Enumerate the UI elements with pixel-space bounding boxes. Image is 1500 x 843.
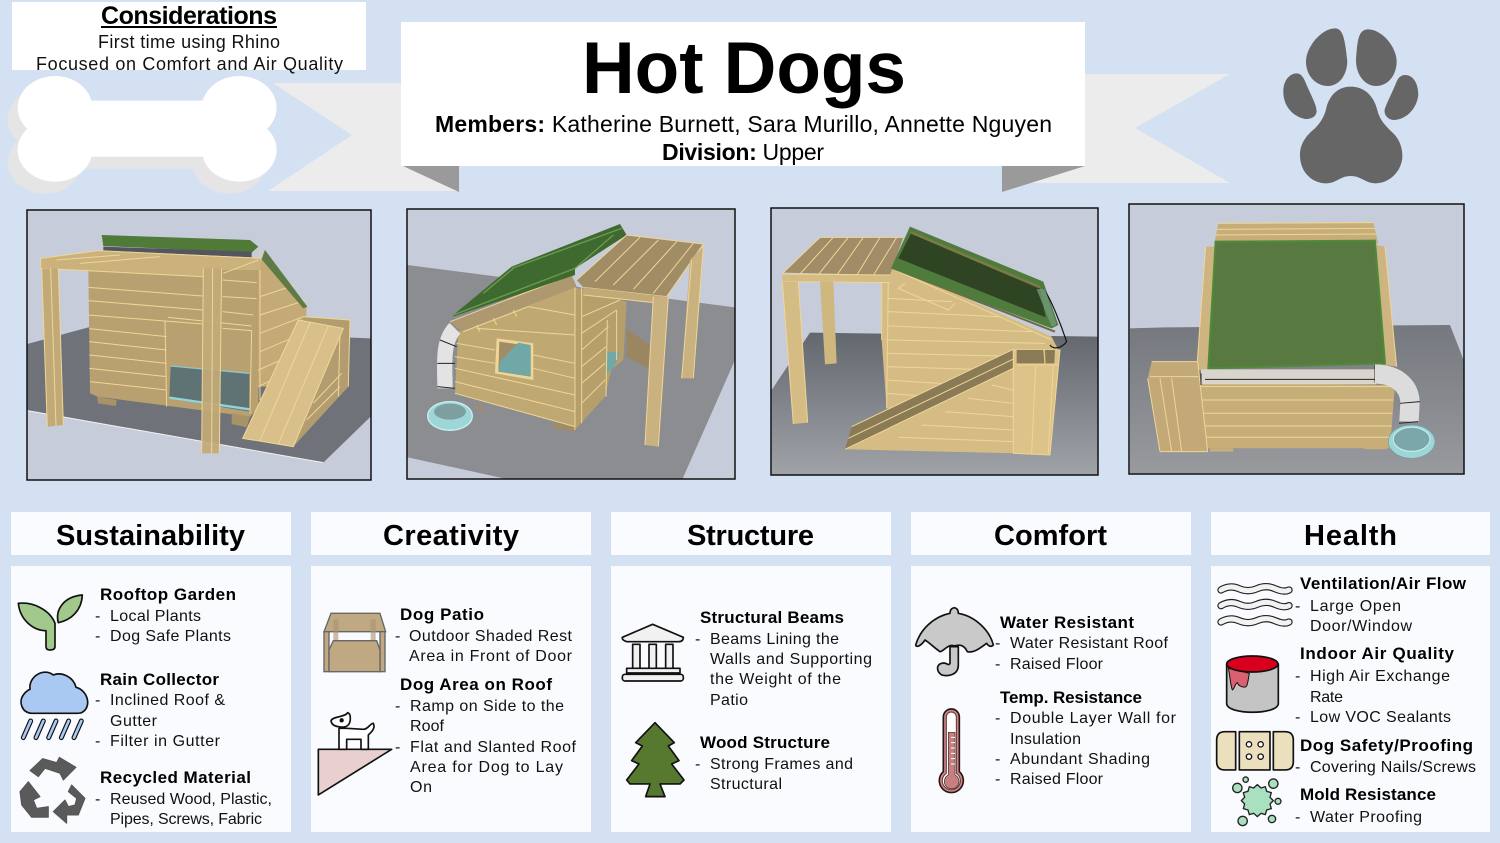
icon: dog on ramp <box>318 713 392 795</box>
text: Dog Safety/Proofing: Covering Nails/Screws <box>1310 759 1476 776</box>
text: Water Resistant: - <box>995 635 1000 652</box>
render 1 frame <box>27 210 371 480</box>
text: Rain Collector: - <box>95 692 100 709</box>
text: Water Resistant: Water Resistant Roof <box>1010 635 1169 652</box>
text: Dog Area on Roof: Area for Dog to Lay <box>410 759 563 776</box>
text: Water Resistant: Water Resistant <box>1000 613 1134 632</box>
icon: patio shelter <box>324 613 386 672</box>
heading: Structure: Structure <box>687 520 814 552</box>
text: Dog Area on Roof <box>395 675 577 796</box>
icon: air waves <box>1221 587 1289 623</box>
text: Mold Resistance: Water Proofing <box>1310 809 1422 826</box>
text: Rooftop Garden: - <box>95 628 100 645</box>
text: Ventilation/Air Flow: Large Open <box>1310 598 1401 615</box>
considerations text: Focused on Comfort and Air Quality <box>36 54 343 74</box>
text: Indoor Air Quality: Low VOC Sealants <box>1310 709 1451 726</box>
icon: dog bone <box>8 76 277 194</box>
icon: sprout <box>18 595 82 650</box>
considerations panel <box>12 2 366 74</box>
text: Temp. Resistance <box>995 688 1177 788</box>
render 3 frame <box>771 208 1098 475</box>
render 2: rear three-quarter view <box>407 209 735 479</box>
text: Ventilation/Air Flow: Door/Window <box>1310 618 1412 635</box>
text: Recycled Material <box>95 768 272 828</box>
render 2 frame <box>407 209 735 479</box>
render 3: side view with ramp <box>771 208 1098 475</box>
text: Structural Beams: the Weight of the <box>710 671 841 688</box>
text: Dog Area on Roof: On <box>410 779 432 796</box>
text: Rain Collector: Rain Collector <box>100 670 219 689</box>
icon: columned building <box>622 624 683 681</box>
text: Water Resistant: Raised Floor <box>1010 656 1104 673</box>
text: Rooftop Garden: Rooftop Garden <box>100 585 236 604</box>
text: Wood Structure: Wood Structure <box>700 733 830 752</box>
render 1: front view of doghouse <box>27 210 371 480</box>
render 4: top view with green roof <box>1129 204 1464 473</box>
text: Structural Beams: - <box>695 631 700 648</box>
icon: paint can <box>1227 656 1278 712</box>
panel: Sustainability <box>11 512 291 832</box>
text: Recycled Material: - <box>95 791 100 808</box>
text: Ventilation/Air Flow <box>1295 574 1467 635</box>
heading: Health: Health <box>1304 520 1397 552</box>
text: Wood Structure <box>695 733 853 793</box>
text: Indoor Air Quality: - <box>1295 668 1300 685</box>
banner ribbon left <box>268 83 459 191</box>
title panel <box>401 22 1085 166</box>
icon: mold spores <box>1233 777 1281 826</box>
heading: Sustainability: Sustainability <box>56 520 245 552</box>
text: Mold Resistance: Mold Resistance <box>1300 785 1436 804</box>
text: Temp. Resistance: Raised Floor <box>1010 771 1104 788</box>
text: Recycled Material: Recycled Material <box>100 768 251 787</box>
text: Rain Collector: Filter in Gutter <box>110 733 221 750</box>
text: Structural Beams: Patio <box>710 692 748 709</box>
text: Indoor Air Quality: - <box>1295 709 1300 726</box>
panel: Health <box>1211 512 1490 832</box>
text: Wood Structure: Strong Frames and <box>710 756 853 773</box>
text: Temp. Resistance: Double Layer Wall for <box>1010 710 1177 727</box>
icon: pine tree <box>627 723 684 797</box>
text: Wood Structure: Structural <box>710 776 782 793</box>
text: Temp. Resistance: Abundant Shading <box>1010 751 1150 768</box>
text: Water Resistant <box>995 613 1169 673</box>
members line: Members: Katherine Burnett, Sara Murillo, Annette Nguyen <box>435 111 1052 137</box>
text: Rooftop Garden: Dog Safe Plants <box>110 628 231 645</box>
text: Dog Patio: Area in Front of Door <box>409 648 573 665</box>
text: Dog Area on Roof: Flat and Slanted Roof <box>410 739 577 756</box>
considerations heading: Considerations <box>101 2 277 30</box>
ribbon fold right <box>1002 166 1085 192</box>
considerations text: First time using Rhino <box>98 32 280 52</box>
text: Rain Collector <box>95 670 225 750</box>
text: Rain Collector: Inclined Roof & <box>110 692 225 709</box>
considerations text <box>36 32 343 74</box>
icon: recycling arrows <box>20 757 85 823</box>
text: Dog Patio <box>395 605 573 665</box>
text: Rain Collector: Gutter <box>110 713 158 730</box>
icon: paw print <box>1283 28 1418 183</box>
banner ribbon right <box>1002 74 1230 183</box>
text: Wood Structure: - <box>695 756 700 773</box>
text: Mold Resistance: - <box>1295 809 1300 826</box>
text: Dog Patio: - <box>395 628 400 645</box>
text: Dog Area on Roof: Dog Area on Roof <box>400 675 552 694</box>
text: Dog Area on Roof: Roof <box>410 718 445 735</box>
text: Temp. Resistance: - <box>995 771 1000 788</box>
text: Indoor Air Quality <box>1295 644 1455 726</box>
text: Structural Beams <box>695 608 872 709</box>
text: Recycled Material: Reused Wood, Plastic, <box>110 791 272 808</box>
panel: Creativity <box>311 512 591 832</box>
text: Rooftop Garden <box>95 585 236 645</box>
text: Rain Collector: - <box>95 733 100 750</box>
text: Structural Beams: Walls and Supporting <box>710 651 872 668</box>
title: Hot Dogs <box>582 28 906 109</box>
text: Dog Patio: Dog Patio <box>400 605 484 624</box>
text: Temp. Resistance: Temp. Resistance <box>1000 688 1142 707</box>
heading: Creativity: Creativity <box>383 520 519 552</box>
text: Structural Beams: Beams Lining the <box>710 631 839 648</box>
panel: Comfort <box>911 512 1191 832</box>
text: Dog Area on Roof: Ramp on Side to the <box>410 698 564 715</box>
division line: Division: Upper <box>662 139 824 165</box>
text: Rooftop Garden: - <box>95 608 100 625</box>
text: Recycled Material: Pipes, Screws, Fabric <box>110 811 262 828</box>
render 4 frame <box>1129 204 1464 474</box>
text: Mold Resistance <box>1295 785 1436 826</box>
text: Dog Safety/Proofing: - <box>1295 759 1300 776</box>
icon: rain cloud <box>21 672 88 738</box>
heading: Comfort: Comfort <box>994 520 1107 552</box>
ribbon fold left <box>403 166 459 192</box>
text: Indoor Air Quality: Indoor Air Quality <box>1300 644 1455 663</box>
text: Indoor Air Quality: High Air Exchange <box>1310 668 1450 685</box>
panel: Structure <box>611 512 891 832</box>
text: Temp. Resistance: Insulation <box>1010 731 1081 748</box>
text: Temp. Resistance: - <box>995 751 1000 768</box>
icon: thermometer <box>939 709 963 793</box>
text: Dog Safety/Proofing <box>1295 736 1476 776</box>
text: Ventilation/Air Flow: - <box>1295 598 1300 615</box>
text: Ventilation/Air Flow: Ventilation/Air Flow <box>1300 574 1467 593</box>
text: Indoor Air Quality: Rate <box>1310 689 1343 706</box>
text: Rooftop Garden: Local Plants <box>110 608 201 625</box>
icon: protective plate <box>1217 732 1293 770</box>
text: Structural Beams: Structural Beams <box>700 608 844 627</box>
text: Dog Patio: Outdoor Shaded Rest <box>409 628 573 645</box>
text: Water Resistant: - <box>995 656 1000 673</box>
icon: umbrella <box>916 608 993 676</box>
text: Temp. Resistance: - <box>995 710 1000 727</box>
text: Dog Safety/Proofing: Dog Safety/Proofing <box>1300 736 1473 755</box>
text: Dog Area on Roof: - <box>395 698 400 715</box>
text: Dog Area on Roof: - <box>395 739 400 756</box>
